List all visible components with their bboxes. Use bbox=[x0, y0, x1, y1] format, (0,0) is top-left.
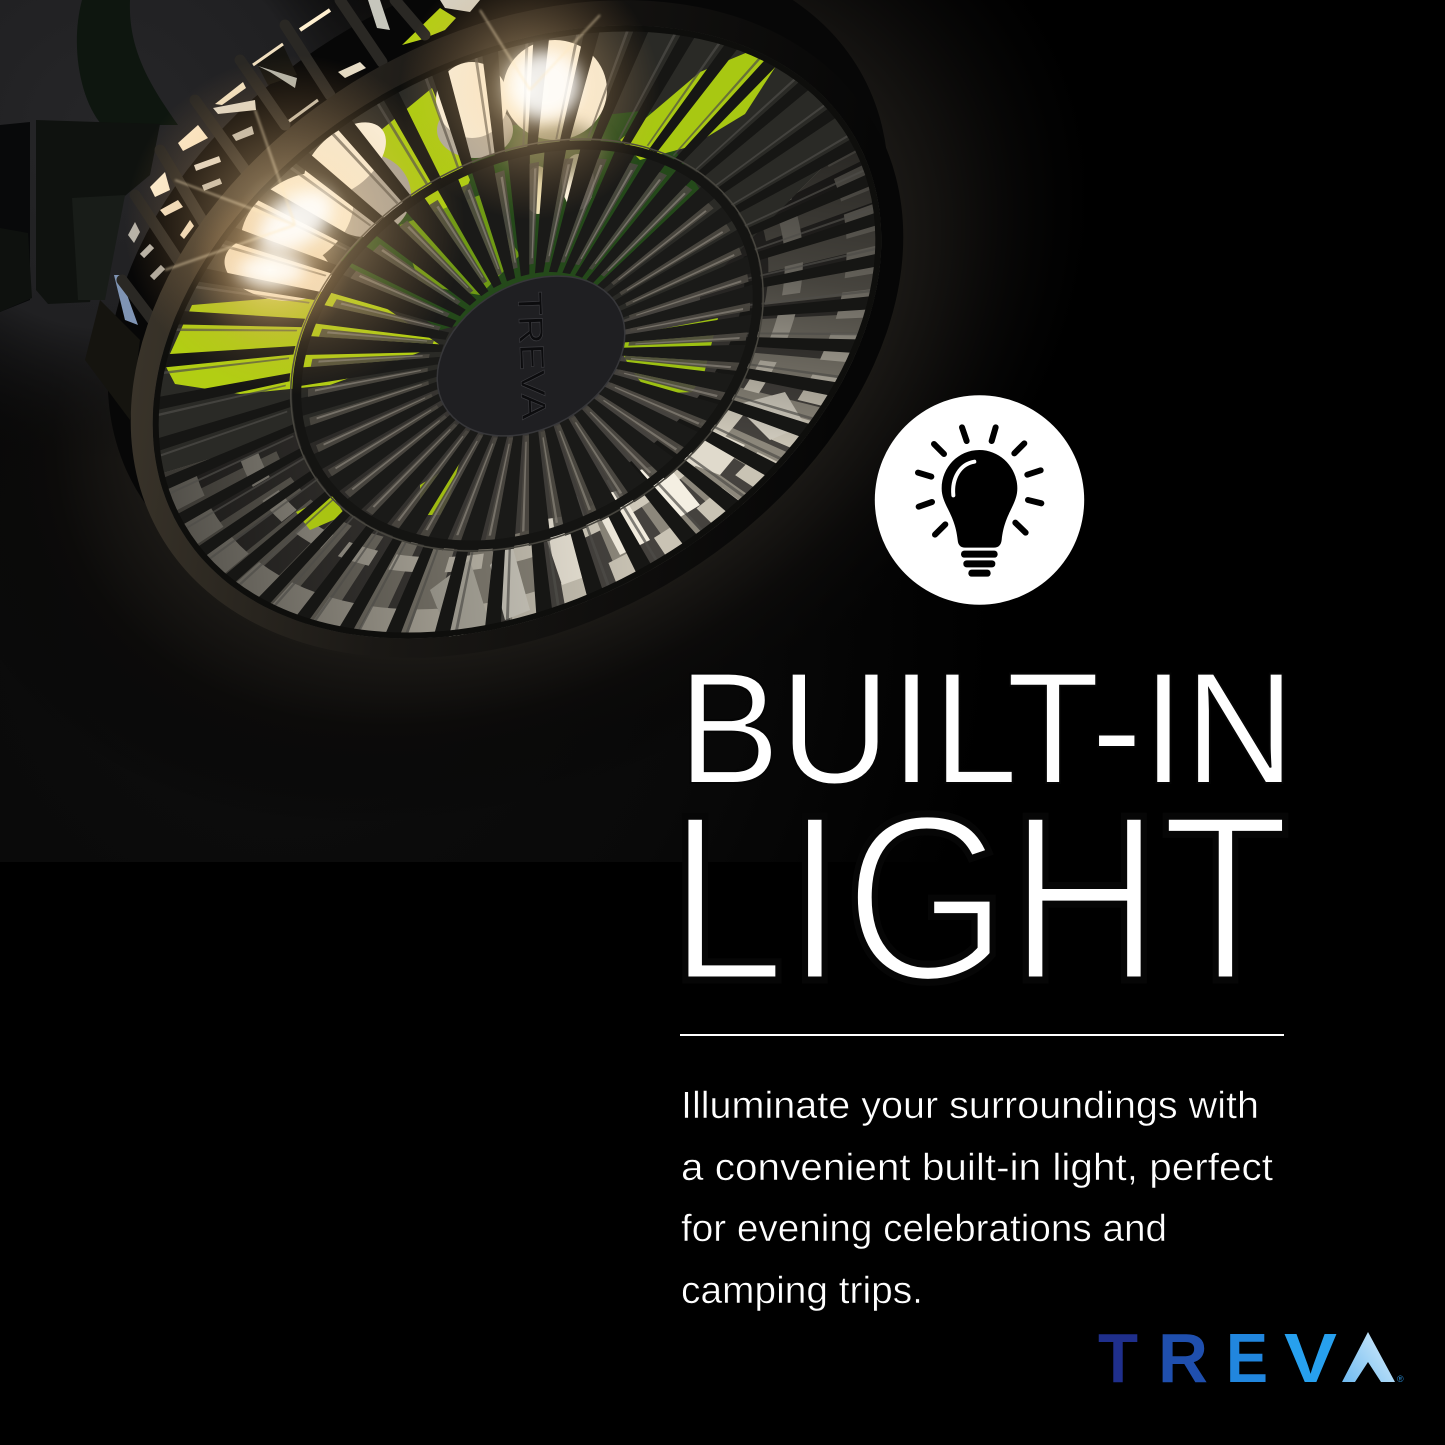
light glare bbox=[125, 0, 660, 395]
logo: TREVA: ® bbox=[1397, 1374, 1404, 1384]
description text: a convenient built-in light, perfect bbox=[681, 1147, 1273, 1189]
lit outer slats lower right bbox=[164, 150, 882, 636]
clip strap bbox=[77, 0, 178, 125]
clip joint bbox=[0, 120, 160, 312]
blade: inner lime bbox=[400, 195, 520, 295]
side cage slats with light bbox=[85, 0, 480, 420]
front rim bbox=[12, 0, 1022, 791]
logo: TREVA: A bbox=[1342, 1319, 1395, 1397]
title: BUILT-IN bbox=[678, 639, 1295, 817]
lamps bbox=[219, 40, 607, 309]
inner ring bbox=[292, 140, 762, 550]
description text bbox=[681, 1085, 1273, 1312]
title: LIGHT bbox=[668, 766, 1290, 1031]
grill back: lights, blades and inner parts bbox=[152, 27, 882, 638]
upper zone dark green backdrop bbox=[340, 110, 700, 330]
hub logo: TREVA bbox=[510, 291, 552, 421]
outer edge ring inside grill bbox=[152, 26, 881, 638]
icon: light bulb badge bbox=[875, 395, 1084, 605]
divider bbox=[680, 1034, 1284, 1036]
fan body side bbox=[0, 0, 1006, 742]
logo: TREVA: V bbox=[1284, 1319, 1337, 1397]
logo: TREVA: T bbox=[1098, 1319, 1138, 1397]
logo: TREVA: R bbox=[1158, 1319, 1208, 1397]
description text: camping trips. bbox=[681, 1270, 923, 1312]
description text: Illuminate your surroundings with bbox=[681, 1085, 1259, 1127]
blade: right lime bbox=[615, 318, 718, 394]
logo: TREVA: E bbox=[1226, 1319, 1268, 1397]
hub bbox=[408, 244, 654, 468]
dark fins bbox=[122, 0, 425, 330]
blade: lower left lime bbox=[166, 292, 440, 394]
blade: upper right lime bbox=[620, 52, 776, 160]
icon: bulb bbox=[942, 450, 1017, 548]
outer zone spokes bbox=[153, 32, 875, 636]
blade: small lower lime bbox=[296, 495, 345, 530]
lamp housing bbox=[344, 156, 411, 237]
blade: centre top lime bbox=[382, 88, 470, 212]
inner zone spokes bbox=[317, 154, 741, 546]
description text: for evening celebrations and bbox=[681, 1208, 1167, 1250]
logo: TREVA bbox=[1098, 1319, 1404, 1397]
product photo: clip fan with light bbox=[0, 0, 904, 642]
title bbox=[668, 639, 1295, 1031]
background bbox=[0, 0, 1007, 862]
